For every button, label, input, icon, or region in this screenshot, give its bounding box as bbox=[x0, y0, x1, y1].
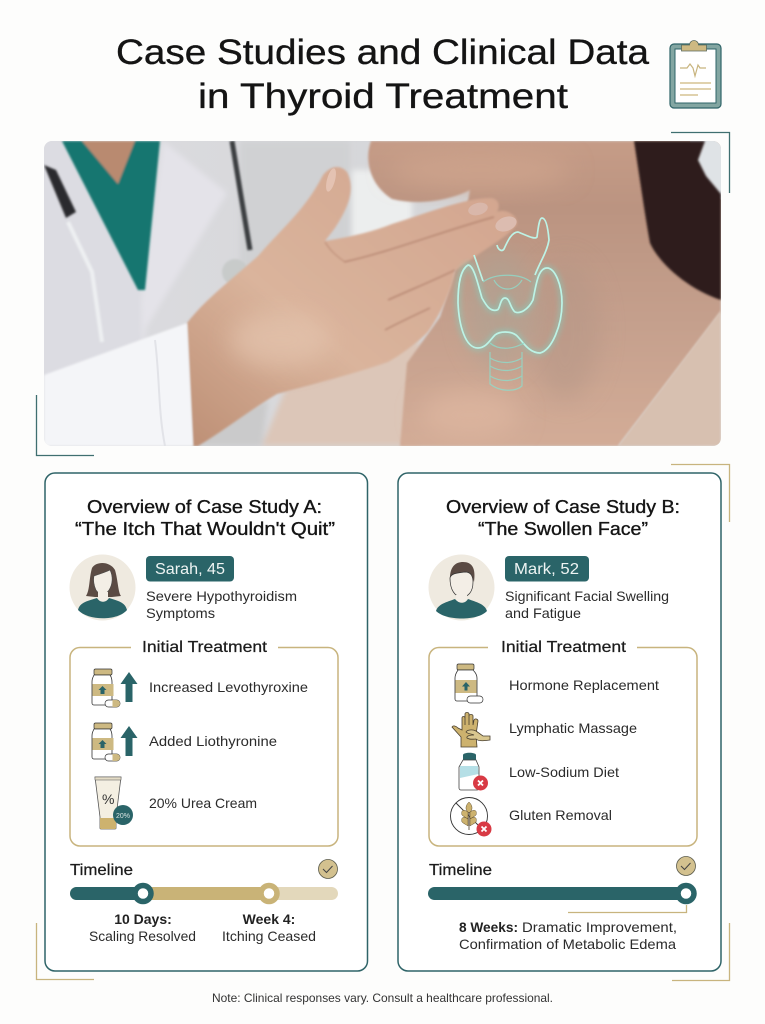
icon: bottle with up arrow bbox=[92, 669, 138, 707]
treatment label: Increased Levothyroxine bbox=[149, 679, 308, 695]
panel: case study B bbox=[398, 473, 721, 971]
heading: case study A bbox=[75, 497, 335, 539]
avatar: Sarah bbox=[70, 554, 136, 620]
neck and jaw bbox=[368, 141, 721, 446]
icon: check badge bbox=[676, 856, 696, 876]
avatar: Mark bbox=[428, 554, 494, 620]
cuff bbox=[44, 323, 193, 446]
milestone: 8 weeks: Dramatic Improvement, bbox=[522, 919, 677, 935]
connector bbox=[568, 905, 686, 912]
text: symptoms: and Fatigue bbox=[505, 605, 581, 621]
text: symptoms bbox=[146, 588, 297, 621]
milestone: 8 weeks: Confirmation of Metabolic Edema bbox=[459, 936, 676, 952]
treatment label: Low-Sodium Diet bbox=[509, 764, 619, 780]
milestone: 10 days: 10 Days: bbox=[114, 911, 172, 927]
icon: cream tube: 20% bbox=[116, 811, 130, 820]
milestone: 10 days bbox=[89, 911, 196, 944]
photo: doctor palpating patient's thyroid bbox=[44, 141, 721, 446]
panel: initial treatment B bbox=[429, 639, 697, 846]
corner bracket: card B top right bbox=[671, 464, 730, 522]
timeline bar A bbox=[70, 886, 338, 902]
text: symptoms bbox=[505, 588, 669, 621]
milestone: 10 days: Scaling Resolved bbox=[89, 928, 196, 944]
corner bracket: photo bottom left bbox=[36, 395, 94, 456]
panel: case study A bbox=[45, 473, 368, 971]
icon: cream tube bbox=[95, 777, 133, 829]
shirt bbox=[618, 310, 721, 446]
text: symptoms: Significant Facial Swelling bbox=[505, 588, 669, 604]
footnote: Note: Clinical responses vary. Consult a healthcare professional. bbox=[212, 991, 553, 1005]
corner bracket: card A bottom left bbox=[36, 923, 94, 980]
corner bracket: top right bbox=[671, 132, 730, 193]
timeline A: Timeline bbox=[70, 862, 133, 879]
title bbox=[116, 33, 650, 116]
heading: case study B bbox=[446, 497, 680, 539]
icon: check badge bbox=[318, 860, 338, 878]
milestone: week 4 bbox=[222, 911, 316, 944]
milestone: 8 weeks: 8 Weeks: bbox=[459, 919, 518, 935]
timeline B: Timeline bbox=[429, 862, 492, 879]
badge: Mark, 52 bbox=[505, 556, 589, 582]
treatment label: Hormone Replacement bbox=[509, 677, 659, 693]
icon: hormone bottle bbox=[455, 664, 483, 703]
text: symptoms: Severe Hypothyroidism bbox=[146, 588, 297, 604]
milestone: week 4: Week 4: bbox=[243, 911, 295, 927]
milestone: week 4: Itching Ceased bbox=[222, 928, 316, 944]
title: in Thyroid Treatment bbox=[198, 77, 568, 116]
timeline A bbox=[70, 860, 338, 944]
text: symptoms: Symptoms bbox=[146, 605, 215, 621]
corner bracket: card B bottom right bbox=[672, 923, 730, 980]
milestone: 8 weeks bbox=[459, 919, 677, 952]
heading: initial treatment: Initial Treatment bbox=[501, 639, 627, 656]
hand bbox=[187, 167, 517, 446]
icon: gluten crossed out bbox=[450, 798, 492, 836]
treatment label: Lymphatic Massage bbox=[509, 720, 637, 736]
badge: Mark, 52: Mark, 52 bbox=[514, 561, 579, 578]
badge: Sarah, 45: Sarah, 45 bbox=[155, 561, 225, 578]
heading: case study B: “The Swollen Face” bbox=[478, 519, 648, 539]
treatment label: Added Liothyronine bbox=[149, 733, 277, 749]
heading: initial treatment: Initial Treatment bbox=[142, 639, 268, 656]
icon: salt shaker crossed out bbox=[459, 753, 488, 790]
thyroid outline bbox=[458, 218, 562, 390]
title: Case Studies and Clinical Data bbox=[116, 33, 650, 72]
treatment label: Gluten Removal bbox=[509, 807, 612, 823]
heading: case study A: “The Itch That Wouldn't Quit” bbox=[75, 519, 335, 539]
hair bbox=[634, 141, 721, 300]
background behind hair bbox=[690, 141, 721, 200]
treatment label: 20% Urea Cream bbox=[149, 795, 257, 811]
icon: massage hands bbox=[452, 712, 490, 747]
heading: case study A: Overview of Case Study A: bbox=[87, 497, 322, 517]
panel: initial treatment A bbox=[70, 639, 338, 846]
badge: Sarah, 45 bbox=[146, 556, 234, 582]
timeline bar B bbox=[428, 886, 694, 902]
heading: case study B: Overview of Case Study B: bbox=[446, 497, 680, 517]
timeline B bbox=[428, 856, 696, 952]
icon: bottle with up arrow bbox=[92, 723, 138, 761]
icon: clipboard bbox=[670, 40, 721, 108]
icon: cream tube: % bbox=[102, 791, 114, 807]
